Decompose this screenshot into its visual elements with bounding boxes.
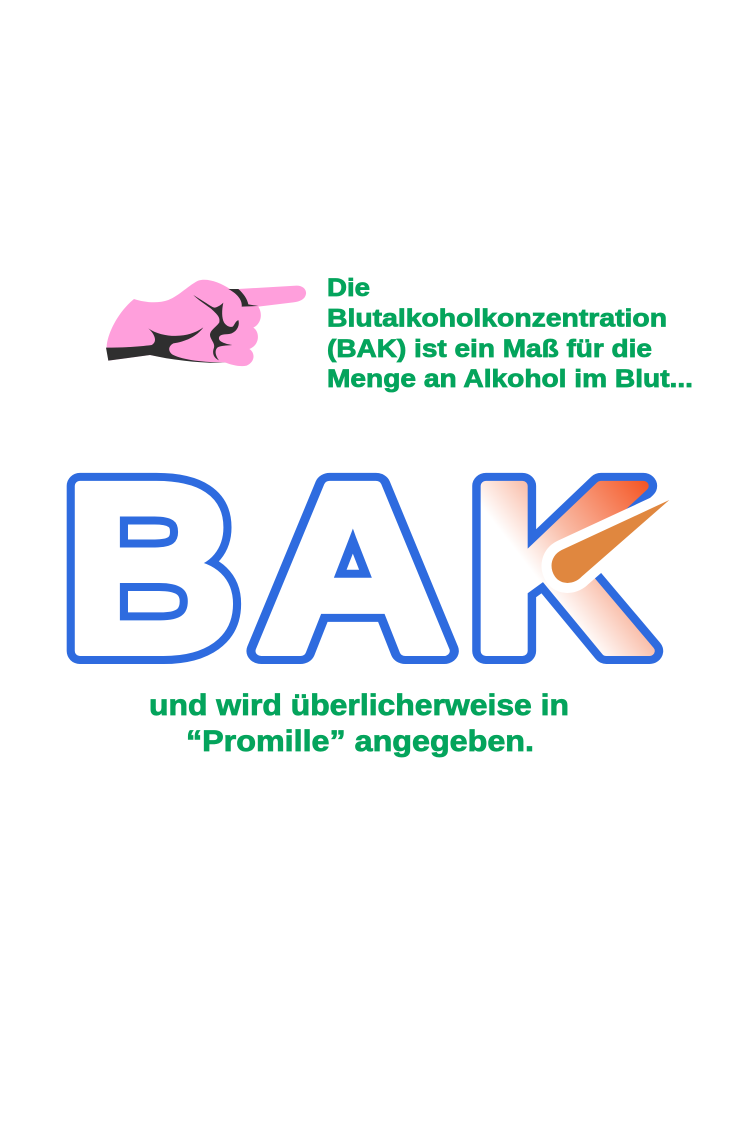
intro text: (BAK) ist ein Maß für die (327, 335, 652, 363)
icon: pointing hand (106, 280, 306, 366)
intro text: Blutalkoholkonzentration (327, 304, 667, 332)
gauge needle (552, 500, 669, 583)
letter B: B (64, 434, 239, 703)
intro text: Menge an Alkohol im Blut... (327, 365, 693, 393)
letter B: B (64, 434, 239, 703)
letter A: A (254, 434, 451, 702)
closing text: und wird überlicherweise in (149, 689, 569, 722)
closing text (149, 689, 569, 758)
letter K with gauge needle: K (469, 435, 652, 703)
letter K with gauge needle: K (469, 435, 652, 703)
intro text (327, 274, 693, 393)
closing text: “Promille” angegeben. (186, 725, 534, 758)
letter A: A (254, 434, 451, 702)
intro text: Die (327, 274, 370, 302)
